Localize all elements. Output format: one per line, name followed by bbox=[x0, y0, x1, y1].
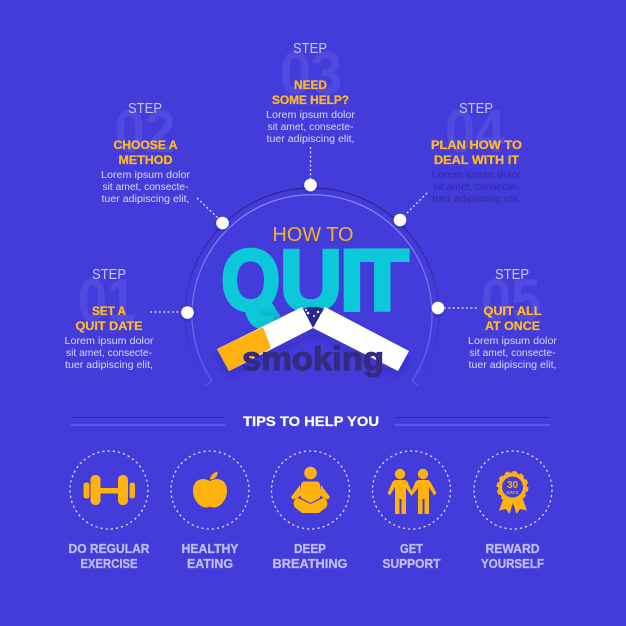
step 04 bbox=[431, 98, 522, 205]
tip: support: GET bbox=[400, 542, 423, 556]
step 01 bbox=[64, 267, 154, 371]
tip: breathing: DEEP bbox=[294, 542, 326, 556]
tip: support bbox=[372, 451, 450, 571]
number 04: 04 bbox=[445, 98, 506, 165]
step 02: CHOOSE A bbox=[114, 138, 178, 152]
step 05: QUIT ALL bbox=[484, 304, 542, 318]
icon: two people bbox=[388, 469, 436, 514]
number 01: 01 bbox=[78, 267, 136, 334]
step 02: METHOD bbox=[118, 153, 173, 167]
step 01: QUIT DATE bbox=[76, 319, 142, 333]
cigarette bbox=[217, 307, 409, 371]
step 03: STEP bbox=[293, 41, 327, 57]
icon: apple bbox=[193, 472, 227, 508]
step 05: tuer adipiscing elit, bbox=[468, 359, 556, 371]
ash bbox=[303, 307, 324, 328]
step 04: sit amet, consecte- bbox=[434, 181, 520, 193]
connectors bbox=[150, 147, 477, 312]
step 01: Lorem ipsum dolor bbox=[64, 335, 154, 347]
tip: breathing bbox=[272, 451, 350, 571]
step 04: tuer adipiscing elit, bbox=[432, 193, 520, 205]
number 03: 03 bbox=[280, 40, 342, 107]
step 03: NEED bbox=[294, 78, 327, 92]
icon: dumbbell bbox=[84, 475, 135, 505]
icon: 30 days badge: 30 bbox=[507, 480, 518, 491]
step 05: AT ONCE bbox=[485, 319, 540, 333]
step 01: STEP bbox=[92, 267, 126, 283]
step 03: tuer adipiscing elit, bbox=[266, 133, 354, 145]
q tail bbox=[250, 303, 281, 327]
step 03: sit amet, consecte- bbox=[268, 121, 354, 133]
step 05 bbox=[468, 267, 558, 371]
step 04: PLAN HOW TO bbox=[431, 138, 522, 152]
tip: reward bbox=[474, 451, 552, 571]
gauge dots bbox=[181, 179, 444, 319]
step 04: STEP bbox=[459, 101, 493, 117]
number 05: 05 bbox=[481, 267, 541, 334]
step 05: STEP bbox=[495, 267, 529, 283]
icon: 30 days badge bbox=[498, 472, 528, 514]
title: how to: HOW TO bbox=[272, 224, 354, 246]
step 01: SET A bbox=[92, 304, 126, 318]
step 02: STEP bbox=[128, 101, 162, 117]
title: quit bbox=[221, 233, 409, 329]
step 03 bbox=[266, 40, 356, 145]
tip: support: SUPPORT bbox=[382, 557, 441, 571]
title: smoking: smoking bbox=[242, 340, 384, 377]
step 02: sit amet, consecte- bbox=[102, 181, 189, 193]
step 01: sit amet, consecte- bbox=[66, 347, 152, 359]
step 04: Lorem ipsum dolor bbox=[432, 169, 522, 181]
tip: exercise: EXERCISE bbox=[80, 557, 138, 571]
tip: exercise: DO REGULAR bbox=[68, 542, 150, 556]
tip: exercise bbox=[68, 451, 150, 571]
tip: reward: YOURSELF bbox=[481, 557, 544, 571]
number 02: 02 bbox=[114, 98, 176, 165]
step 03: SOME HELP? bbox=[272, 93, 349, 107]
step 05: sit amet, consecte- bbox=[470, 347, 556, 359]
tip: eating: EATING bbox=[187, 557, 233, 571]
tip: reward: REWARD bbox=[486, 542, 540, 556]
step 04: DEAL WITH IT bbox=[434, 153, 520, 167]
icon: meditating person bbox=[291, 467, 330, 513]
tip: eating: HEALTHY bbox=[182, 542, 239, 556]
step 01: tuer adipiscing elit, bbox=[65, 359, 153, 371]
step 02: Lorem ipsum dolor bbox=[101, 169, 191, 181]
left part bbox=[217, 307, 313, 371]
gauge arc bbox=[185, 188, 439, 385]
tip: eating bbox=[171, 451, 249, 571]
right part bbox=[313, 307, 409, 371]
tips heading: TIPS TO HELP YOU bbox=[243, 413, 379, 429]
step 05: Lorem ipsum dolor bbox=[468, 335, 558, 347]
filter bbox=[217, 327, 271, 371]
title: quit: Q bbox=[221, 234, 280, 329]
title: quit: UIT bbox=[280, 233, 409, 329]
step 02: tuer adipiscing elit, bbox=[102, 193, 190, 205]
icon: 30 days badge: DAYS bbox=[506, 490, 519, 495]
tip: breathing: BREATHING bbox=[272, 557, 348, 571]
step 03: Lorem ipsum dolor bbox=[266, 109, 356, 121]
step 02 bbox=[101, 98, 191, 205]
